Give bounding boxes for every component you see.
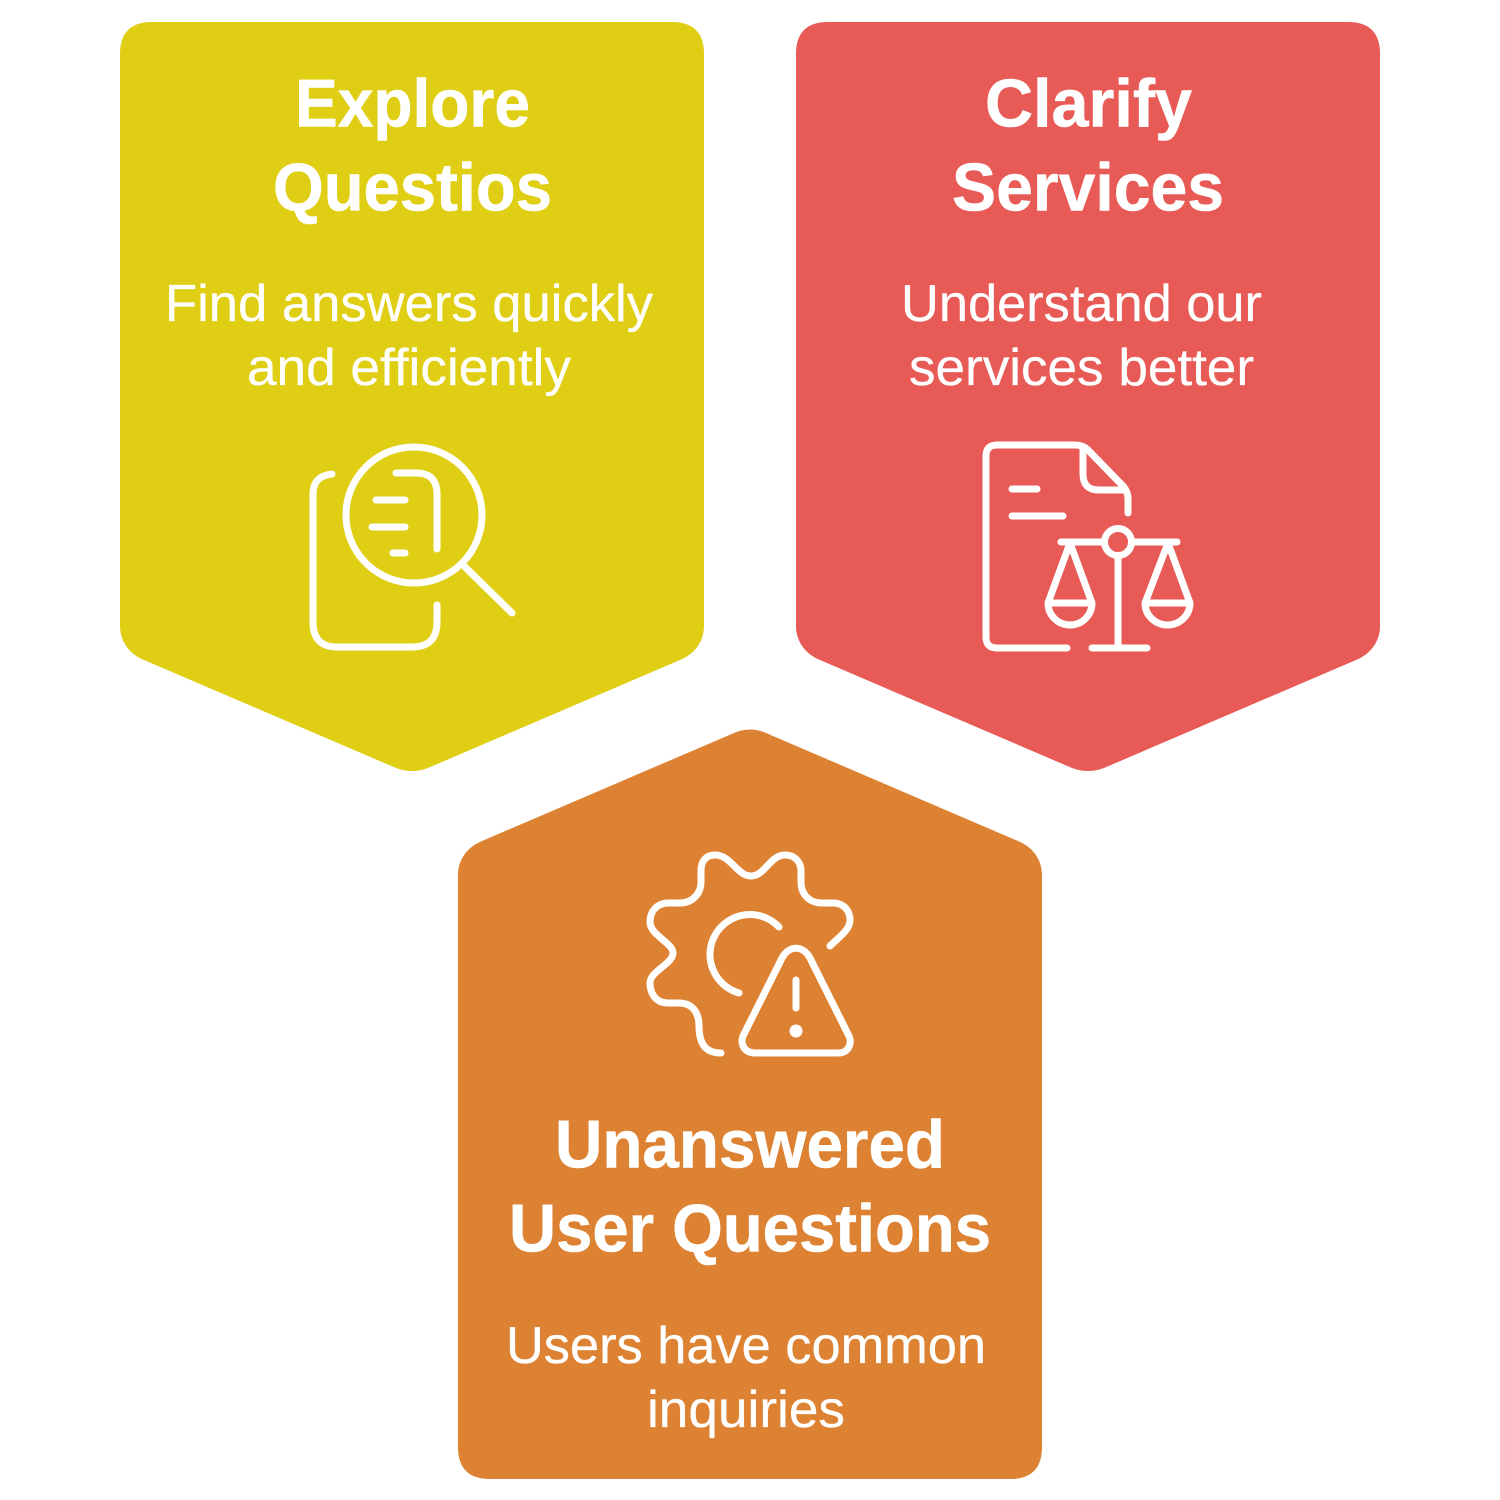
icon: document with scales xyxy=(986,445,1190,648)
text: find answers: Find answers quickly xyxy=(165,275,653,333)
heading: unanswered user questions xyxy=(509,1106,991,1266)
heading: clarify services: Services xyxy=(952,150,1224,226)
text: users have common inquiries: inquiries xyxy=(647,1381,845,1439)
heading: clarify services xyxy=(952,66,1224,226)
heading: explore questios: Questios xyxy=(273,150,552,226)
text: understand our services xyxy=(901,275,1262,397)
heading: explore questios: Explore xyxy=(295,66,530,142)
panel: explore questions xyxy=(120,22,704,771)
heading: explore questios xyxy=(273,66,552,226)
text: find answers xyxy=(165,275,653,397)
heading: clarify services: Clarify xyxy=(985,66,1192,142)
panel: unanswered user questions xyxy=(458,730,1042,1479)
text: users have common inquiries: Users have common xyxy=(506,1317,986,1375)
icon: warning dot xyxy=(790,1024,802,1038)
text: understand our services: Understand our xyxy=(901,275,1262,333)
panel: clarify services xyxy=(796,22,1380,771)
text: find answers: and efficiently xyxy=(247,339,571,397)
text: understand our services: services better xyxy=(909,339,1254,397)
icon: magnifying glass over document xyxy=(313,447,512,647)
heading: unanswered user questions: Unanswered xyxy=(555,1106,945,1182)
panel shape: red pentagon xyxy=(796,22,1380,771)
text: users have common inquiries xyxy=(506,1317,986,1439)
panel shape: orange pentagon xyxy=(458,730,1042,1479)
icon: gear with warning triangle xyxy=(650,855,850,1053)
heading: unanswered user questions: User Questions xyxy=(509,1190,991,1266)
panel shape: yellow pentagon xyxy=(120,22,704,771)
